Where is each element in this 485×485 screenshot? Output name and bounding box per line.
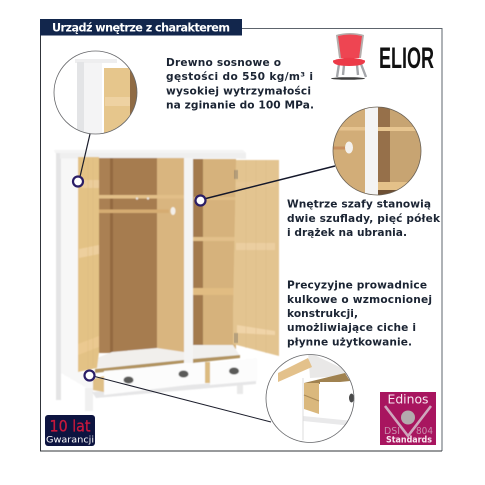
badge: Edinos DSI 804 standards: 804	[416, 426, 433, 437]
heading bar	[40, 19, 242, 36]
wardrobe illustration	[54, 150, 279, 411]
panel frame	[40, 28, 442, 451]
drawers	[92, 358, 257, 398]
text block: wood density: Drewno sosnowe o	[166, 57, 281, 69]
logo: chair icon	[331, 33, 366, 80]
text block: wood density: gęstości do 550 kg/m³ i	[166, 71, 313, 83]
heading bar: Urządź wnętrze z charakterem	[52, 22, 230, 34]
badge: 10-year warranty: 10 lat	[50, 416, 90, 436]
text block: drawer runners: kulkowe o wzmocnionej	[287, 294, 432, 306]
logo: brand name: ELIOR	[379, 42, 434, 75]
right compartment interior	[193, 159, 240, 363]
connector: drawer	[89, 375, 271, 422]
marker: interior	[196, 196, 206, 206]
wardrobe carcass	[54, 150, 246, 411]
text block: drawer runners: umożliwiające ciche i	[287, 322, 416, 334]
text block: drawer runners: Precyzyjne prowadnice	[287, 280, 427, 292]
badge: Edinos DSI 804 standards	[380, 392, 436, 446]
text block: wood density	[166, 57, 314, 112]
connector: interior	[200, 166, 335, 200]
left compartment interior	[95, 158, 184, 373]
centre post	[184, 158, 193, 363]
callout lens: interior detail	[333, 107, 422, 196]
marker: door	[73, 176, 83, 186]
badge: Edinos DSI 804 standards: Standards	[386, 436, 432, 446]
text block: drawer runners	[287, 280, 432, 349]
left door	[78, 157, 99, 372]
right door	[233, 160, 279, 356]
infographic canvas	[40, 19, 442, 452]
badge: 10-year warranty: Gwarancji	[46, 436, 94, 446]
text block: interior: Wnętrze szafy stanowią	[287, 198, 431, 210]
marker: drawer	[84, 370, 94, 380]
text block: interior: dwie szuflady, pięć półek	[287, 213, 441, 225]
connector: door	[79, 134, 90, 181]
text block: drawer runners: płynne użytkowanie.	[287, 337, 412, 349]
text block: wood density: na zginanie do 100 MPa.	[166, 100, 314, 112]
text block: wood density: wysokiej wytrzymałości	[166, 86, 311, 98]
badge: Edinos DSI 804 standards: Edinos	[388, 392, 428, 406]
callout lens: drawer detail	[266, 352, 354, 443]
badge: Edinos DSI 804 standards: DSI	[384, 426, 400, 437]
badge: 10-year warranty	[45, 415, 95, 446]
text block: drawer runners: konstrukcji,	[287, 308, 358, 320]
callout lens: door detail	[54, 51, 138, 135]
text block: interior	[287, 198, 441, 239]
text block: interior: i drążek na ubrania.	[287, 227, 407, 239]
